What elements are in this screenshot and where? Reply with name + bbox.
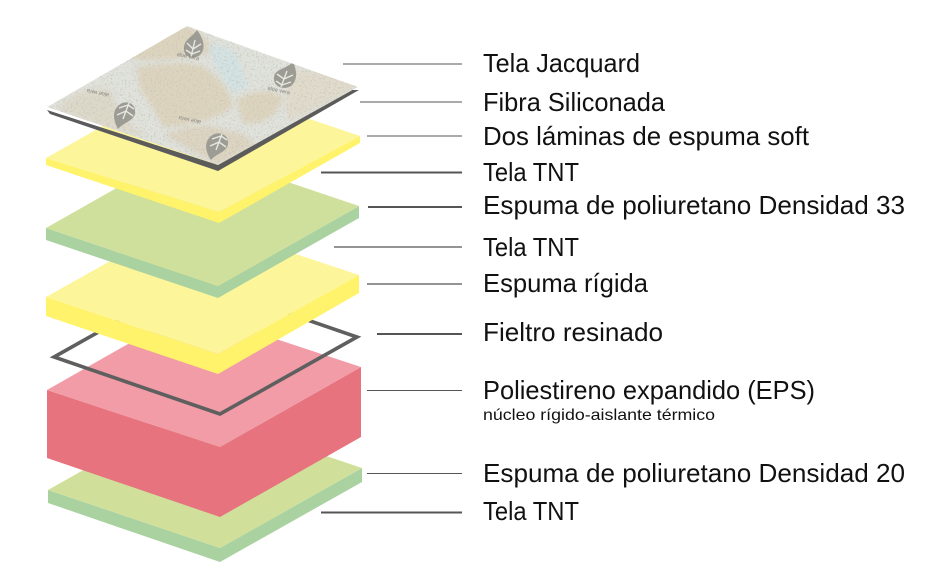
layer: Tela Jacquard fabric: [48, 26, 358, 165]
icon: aloe vera leaf bottom: aloe vera: [177, 114, 202, 125]
leader line: Espuma Densidad 20: [367, 472, 462, 474]
icon: aloe vera leaf bottom: [177, 114, 228, 160]
label: Fibra Siliconada: Fibra Siliconada: [483, 87, 666, 117]
layer: Espuma rígida: [46, 218, 359, 374]
icon: aloe vera leaf right: [267, 62, 296, 97]
icon: aloe vera leaf left: [85, 87, 135, 129]
leader line: Espuma Densidad 33: [368, 206, 462, 208]
leader line: Fibra Siliconada: [360, 101, 462, 103]
label: Poliestireno expandido (EPS): Poliestireno expandido (EPS): [483, 375, 815, 405]
label: Espuma de poliuretano Densidad 20: Espuma de poliuretano Densidad 20: [483, 458, 905, 488]
layer: Poliestireno expandido (EPS): [47, 310, 361, 517]
label: Fieltro resinado: Fieltro resinado: [483, 317, 663, 347]
layer: Fieltro resinado: [54, 280, 357, 414]
label: Dos láminas de espuma soft: Dos láminas de espuma soft: [483, 121, 810, 151]
leader line: Espuma rígida: [367, 283, 462, 285]
label: Espuma de poliuretano Densidad 33: Espuma de poliuretano Densidad 33: [483, 190, 905, 220]
layer: Espuma de poliuretano Densidad 20: [48, 410, 362, 562]
label: Tela TNT: Tela TNT: [483, 157, 579, 187]
icon: aloe vera leaf left: aloe vera: [85, 87, 110, 98]
layer: Espuma de poliuretano Densidad 33: [46, 148, 359, 298]
label: Tela TNT: Tela TNT: [483, 232, 579, 262]
fabric speckle: [50, 28, 356, 164]
layer: Fibra Siliconada dark sheet: [47, 90, 359, 171]
layer: Dos láminas de espuma soft: [46, 78, 360, 223]
leader line: Tela Jacquard: [343, 63, 462, 65]
leader line: Fieltro resinado: [377, 333, 462, 335]
label: Tela Jacquard: Tela Jacquard: [483, 48, 640, 78]
leader line: Tela TNT 3: [321, 512, 462, 514]
label: Tela TNT: Tela TNT: [483, 496, 579, 526]
leader line: Poliestireno: [367, 390, 462, 392]
leader line: Tela TNT 1: [321, 172, 462, 174]
icon: aloe vera leaf top: [176, 30, 204, 63]
leader line: Tela TNT 2: [334, 246, 462, 248]
icon: aloe vera leaf top: aloe vera: [176, 52, 200, 63]
fabric pattern patches: [60, 26, 358, 165]
label: Espuma rígida: Espuma rígida: [483, 268, 649, 298]
leader line: Dos láminas de espuma soft: [367, 135, 462, 137]
sublabel: núcleo rígido-aislante térmico: núcleo rígido-aislante térmico: [483, 407, 715, 424]
icon: aloe vera leaf right: aloe vera: [267, 86, 291, 97]
